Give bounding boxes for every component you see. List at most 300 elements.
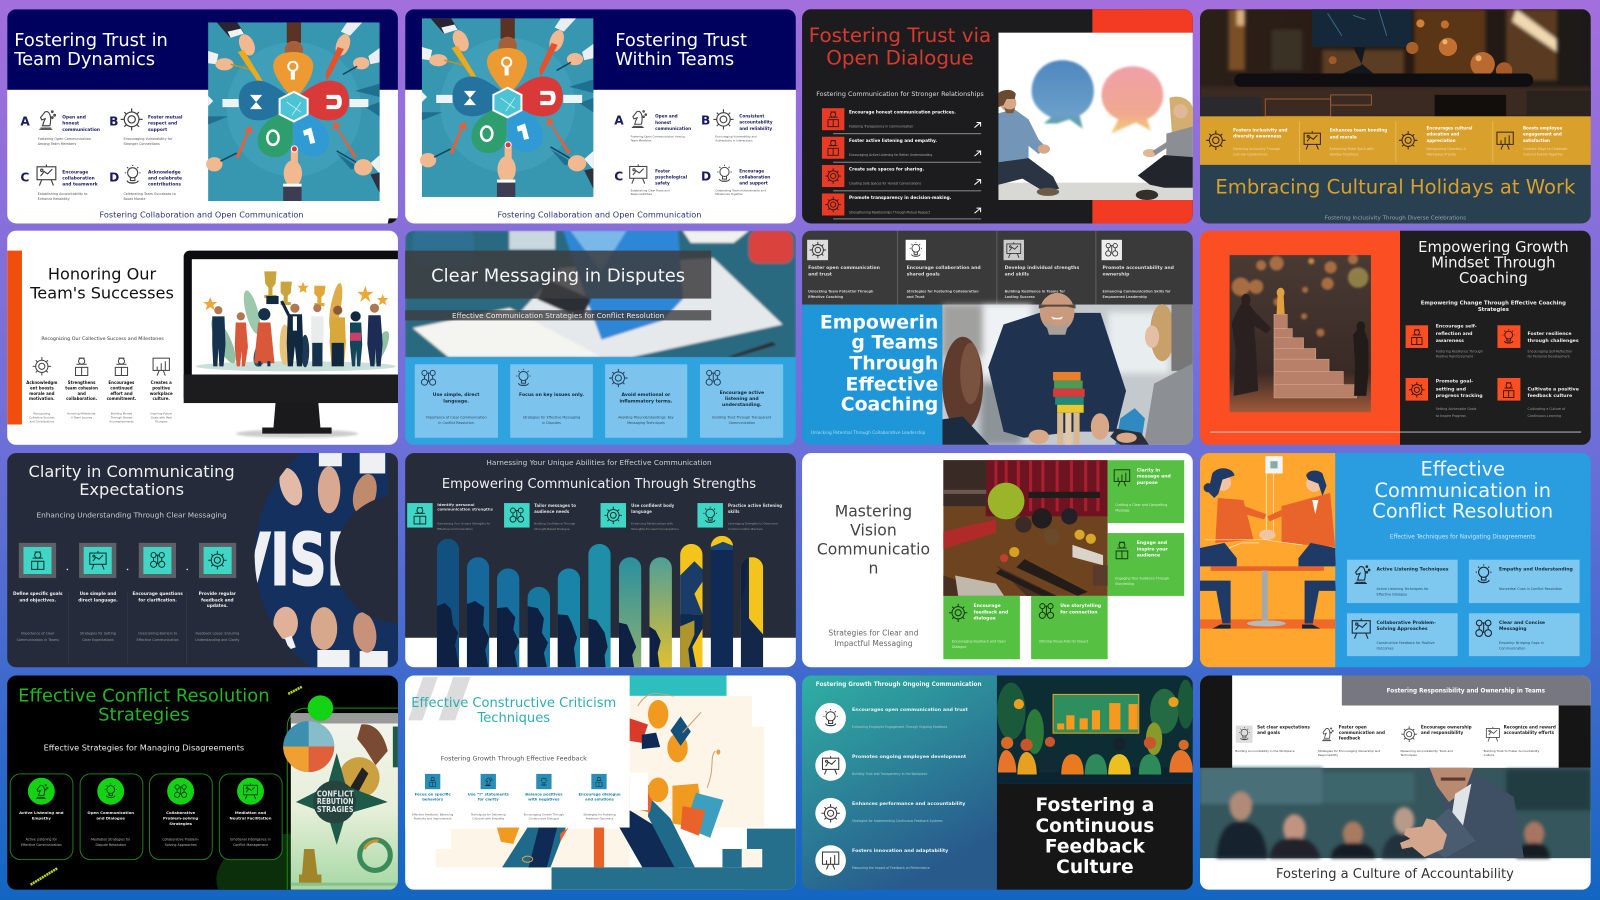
benefit 4 [815, 845, 949, 876]
title: Fostering a Culture of Accountability [1276, 867, 1514, 882]
item B [109, 108, 183, 146]
title [820, 312, 938, 416]
card 1: language. [443, 399, 469, 405]
image: phone with compass poster [283, 708, 398, 890]
card 1: in Conflict Resolution [438, 421, 474, 425]
subtitle: Recognizing Our Collective Success and Milestones [41, 336, 164, 342]
step 3: Encourage questions [132, 591, 183, 597]
image: team hands around flower diagram [206, 22, 380, 201]
item 3: commitment. [107, 396, 137, 401]
card 1: Empathy [32, 815, 51, 820]
image: figures with glowing stairs [1230, 254, 1371, 412]
card 2: Strategies for Effective Messaging [523, 415, 580, 419]
card 4 [700, 364, 783, 438]
item A [614, 111, 691, 142]
subtitle [1421, 301, 1566, 313]
card 3: Collaborative [166, 810, 195, 815]
separator dots [67, 569, 188, 570]
column 3 [1399, 126, 1473, 157]
item 4 [150, 358, 173, 423]
step 2: Use simple and [80, 591, 116, 597]
card 1: Importance of Clear Communication [426, 415, 487, 419]
item 2: team cohesion [65, 385, 98, 390]
panel: slide 13 Effective Conflict Resolution Strategies [7, 676, 398, 900]
item A: communication [655, 126, 691, 131]
item D: Milestones Together [715, 192, 744, 196]
card 2: in Disputes [542, 421, 561, 425]
card 1 [1347, 560, 1458, 603]
card 1: Crafting a Clear and Compelling [1115, 503, 1167, 507]
item B: accountability [739, 119, 773, 124]
item 1: morale and [29, 391, 55, 396]
columns [1206, 121, 1567, 162]
item 2: through challenges [1528, 338, 1579, 344]
image: hands around the word VISION: VISI [231, 518, 346, 602]
panel: slide 2 Fostering Trust Within Teams [405, 9, 796, 223]
image: person with shopping bags illustration [436, 676, 796, 890]
panel: slide 3 Fostering Trust via Open Dialogue [802, 9, 1193, 223]
step 3: Overcoming Barriers to [138, 632, 177, 636]
item 3: Measuring Accountability: Tools and [1401, 749, 1453, 753]
column 3: education and [1427, 132, 1459, 137]
strength 1: Effective Communication [437, 527, 473, 531]
card 3: Collaborative Problem- [1377, 620, 1436, 626]
card 4: Emotional Intelligence in [230, 838, 271, 842]
item B: and reliability [739, 126, 772, 131]
item 1: motivation. [29, 396, 55, 401]
item A: Team Members [630, 138, 652, 142]
top subtitle: Harnessing Your Unique Abilities for Effective Communication [486, 458, 712, 467]
item D: Encourage [739, 168, 764, 173]
title: Fostering a [1035, 795, 1154, 816]
title: Effective Constructive Criticism [411, 696, 616, 711]
item C: Responsibilities [631, 192, 652, 196]
item D: Acknowledge [148, 169, 181, 175]
item 1 [26, 357, 57, 423]
card 3: inflammatory terms. [619, 399, 673, 405]
title [411, 696, 616, 726]
item C: psychological [655, 175, 688, 180]
strength 2: audience needs [534, 509, 570, 514]
title: Coaching [841, 394, 938, 416]
card 2: Mediation Strategies for [91, 838, 131, 842]
item 2: collaboration. [66, 396, 98, 401]
benefit 2: Promotes ongoing employee development [852, 754, 967, 760]
image: monitor with celebrating team [184, 251, 398, 438]
card 2: Empathy and Understanding [1499, 566, 1573, 572]
column 4: Promote accountability and [1103, 265, 1174, 271]
item C: collaboration [62, 176, 95, 182]
column 3: Building Resilience in Teams for [1005, 290, 1065, 294]
benefit 4: Fosters innovation and adaptability [852, 848, 949, 854]
title: Embracing Cultural Holidays at Work [1215, 175, 1576, 198]
step 2: direct language. [78, 597, 118, 603]
item 4: Encourage dialogue [578, 793, 621, 797]
title: Through [849, 352, 938, 374]
item 1: Acknowledgm [26, 380, 57, 385]
strength 3 [601, 503, 679, 531]
item 4: Inspiring Future [150, 411, 172, 415]
subtitle: Fostering Growth Through Effective Feedback [441, 755, 587, 763]
card 4: Neutral Facilitation [230, 815, 272, 820]
item 3: Promote goal- [1436, 379, 1473, 385]
card 2: Engage and [1137, 540, 1167, 546]
item B: respect and [148, 120, 177, 126]
step 4: feedback and [201, 597, 234, 603]
strength 1: communication strengths [437, 507, 494, 512]
item 3 [1400, 725, 1472, 757]
column 1: Fosters inclusivity and [1233, 128, 1287, 134]
card 4: Empathy: Bridging Gaps in [1499, 641, 1544, 645]
heading: Fostering Growth Through Ongoing Communication [816, 682, 982, 688]
title: Team's Successes [29, 284, 174, 303]
card 4: Communication [729, 421, 755, 425]
item 3: continued [110, 385, 133, 390]
column 3: Recognizing Diversity: A [1427, 147, 1467, 151]
item 1: Collective Success [29, 415, 55, 419]
card 4: Clear and Concise [1499, 620, 1545, 626]
title: Within Teams [615, 49, 734, 70]
item D: and support [739, 181, 768, 186]
item D: collaboration [739, 175, 770, 180]
item 4: Goals with Past [151, 415, 173, 419]
subtitle: Enhancing Understanding Through Clear Messaging [37, 510, 227, 519]
step 1: Communication in Teams [17, 638, 59, 642]
item 3: Encouraging Growth Through [524, 812, 564, 816]
step 4: Feedback Loops: Ensuring [195, 632, 239, 636]
card 4: Mediation and [235, 810, 266, 815]
card 4: Communication [1499, 646, 1525, 650]
card 4: for connection [1060, 609, 1098, 615]
item 2: Responsibility [1318, 753, 1338, 757]
title: g Teams [851, 332, 938, 354]
card 1: Effective Communication [21, 843, 62, 847]
column 4: Empowered Leadership [1103, 295, 1148, 299]
item A: A [20, 115, 30, 129]
card 3 [149, 774, 212, 860]
item 4: and solutions [585, 798, 615, 802]
item 2: feedback [1339, 735, 1361, 740]
step 4 [195, 543, 239, 642]
card 2: Dispute Resolution [95, 843, 126, 847]
step 3: for clarification. [138, 597, 177, 603]
title: Clear Messaging in Disputes [431, 266, 685, 287]
footer: Fostering Inclusivity Through Diverse Celebrations [1325, 215, 1466, 221]
item D [109, 165, 182, 201]
item 4: culture. [153, 396, 170, 401]
title: Empowerin [820, 312, 938, 334]
card 2 [1108, 533, 1184, 596]
image: phone with compass poster: REBUTION [317, 797, 354, 806]
strength 3: Use confident body [631, 503, 675, 508]
title: Techniques [477, 711, 550, 726]
strength 1 [407, 502, 494, 531]
item 1 [1406, 324, 1483, 359]
item B: B [701, 113, 710, 127]
benefit 1: Enhancing Employee Engagement Through Ongoing Feedback [852, 725, 948, 729]
title: Feedback [1045, 837, 1146, 858]
footer: Fostering Collaboration and Open Communication [100, 209, 304, 219]
step 2: Clear Expectations [82, 638, 114, 642]
title: Coaching [1459, 270, 1528, 287]
item 2 [468, 774, 510, 820]
item 1: Positive Reinforcement [1436, 355, 1474, 359]
strength 3: Enhancing Relationships with [631, 521, 673, 525]
item 4 [1497, 378, 1579, 418]
panel: slide 1 Fostering Trust in Team Dynamics [7, 9, 398, 223]
item B: Consistent [739, 113, 764, 118]
item 4: workplace [150, 391, 173, 396]
card 3: feedback and [973, 609, 1008, 615]
item 2: Strategies for Encouraging Ownership and [1318, 749, 1380, 753]
title [29, 462, 235, 499]
item 1: Encourage honest communication practices. [849, 109, 956, 115]
title [18, 686, 270, 725]
item 2: Use “I” statements [468, 793, 510, 797]
card 3: Messaging Techniques [627, 421, 665, 425]
subtitle: Strategies [1478, 307, 1509, 313]
column 1 [807, 240, 880, 299]
card 2 [80, 774, 143, 860]
footer: Unlocking Potential Through Collaborative Leadership [811, 430, 926, 436]
column 3: Workplace Priority [1427, 153, 1456, 157]
panel: slide 8 Empowering Growth Mindset Through Coaching [1200, 231, 1591, 445]
card 3: Constructive Feedback for Positive [1377, 641, 1435, 645]
item 2: A Team Journey [71, 415, 93, 419]
decorative quote marks [408, 677, 470, 720]
item 4: positive [152, 385, 170, 390]
item B [701, 109, 773, 142]
item 3: progress tracking [1436, 393, 1483, 399]
item 3: and responsibility [1421, 730, 1464, 735]
item 1: Fostering Transparency in Communication [849, 125, 913, 129]
item 2: Foster active listening and empathy. [849, 138, 937, 144]
column 4 [1102, 240, 1174, 299]
item B: Encouraging Vulnerability for [123, 137, 173, 141]
item 1: Focus on specific [415, 793, 451, 797]
item 3: Encourage ownership [1421, 725, 1472, 730]
step 3 [132, 543, 183, 642]
strength 3: language [631, 509, 652, 514]
item 4: Strategies for Fostering [583, 812, 616, 816]
image: two people talking with speech bubbles [998, 33, 1193, 200]
footer: Fostering Collaboration and Open Communication [498, 209, 701, 219]
column 2: Holiday Traditions [1330, 153, 1359, 157]
item 4 [822, 193, 981, 219]
card 1: Active Listening and [19, 810, 64, 815]
title: Fostering Trust [615, 30, 747, 51]
item 2: Techniques for Delivering [470, 812, 506, 816]
title: Effective Conflict Resolution [18, 686, 270, 707]
item 3: with negatives [528, 798, 560, 802]
item 4: Strengthening Relationships Through Mutual Respect [849, 210, 931, 214]
item 2 [1318, 725, 1385, 757]
subtitle: Empowering Change Through Effective Coaching [1421, 301, 1566, 307]
item 1 [1235, 725, 1310, 753]
image: desk with laptop and documents [405, 231, 796, 358]
column 2: Encourage collaboration and [907, 265, 981, 271]
item 1: Recognizing [34, 411, 50, 415]
item A: Fostering Open Communication [38, 137, 91, 141]
column 1: Effective Coaching [808, 295, 844, 299]
card 4 [219, 774, 282, 860]
benefit 3: Strategies for Implementing Continuous Feedback Systems [852, 819, 943, 823]
item D: and celebrate [148, 176, 182, 182]
item 1: reflection and [1436, 331, 1473, 337]
item 1: ent boosts [30, 385, 54, 390]
panel: slide 9 Clarity in Communicating Expectations [7, 453, 398, 667]
item B: Stronger Connections [123, 142, 160, 146]
title [817, 502, 930, 577]
strength 1: Harnessing Your Unique Strengths for [437, 521, 491, 525]
item C: and teamwork [62, 182, 98, 188]
item 2: Foster open [1339, 725, 1367, 730]
item A: Open and [655, 113, 678, 118]
card 3: Strategies [169, 821, 193, 826]
item C: Encourage [62, 169, 88, 175]
item 1: Set clear expectations [1257, 725, 1310, 730]
subtitle: Effective Strategies for Managing Disagreements [44, 743, 244, 753]
item 3 [1406, 378, 1483, 418]
item 3: Encourages [108, 380, 135, 385]
column 4: Enhancing Communication Skills for [1103, 290, 1171, 294]
strength 4 [697, 503, 782, 531]
title: Communication in [1374, 479, 1551, 502]
item 2: for Personal Development [1528, 355, 1571, 359]
card 2: audience [1137, 553, 1160, 559]
title: Fostering Trust via [809, 24, 991, 47]
subtitle: Effective Techniques for Navigating Disagreements [1390, 534, 1536, 540]
item 1: Positivity and Improvement [414, 816, 452, 820]
card 2 [1469, 560, 1580, 603]
item 2 [1497, 325, 1579, 359]
panel: slide 16 Fostering a Culture of Accountability [1200, 676, 1591, 890]
title [1372, 458, 1553, 522]
title [1035, 795, 1154, 878]
item 2: and [77, 391, 86, 396]
item B: support [148, 127, 167, 133]
image: phone with compass poster: CONFLICT [317, 789, 354, 798]
column 1: Cultural Celebrations [1233, 153, 1268, 157]
step 1: Importance of Clear [21, 632, 55, 636]
title: Continuous [1035, 816, 1154, 837]
item 4: Continuous Learning [1528, 414, 1561, 418]
item 3: Balance positives [525, 793, 563, 797]
image: dark office with monitor and ornaments [1200, 9, 1591, 116]
subtitle: Fostering Communication for Stronger Relationships [816, 90, 984, 98]
step 2 [78, 543, 118, 642]
item 3 [107, 358, 137, 423]
card 3: Collaborative Problem- [162, 838, 200, 842]
item B: B [109, 115, 119, 129]
strength 3: Strengths-Focused Conversations [631, 527, 679, 531]
item 3: Constructive Dialogue [529, 816, 559, 820]
item 2: communication and [1339, 730, 1385, 735]
strength 4: skills [728, 509, 740, 514]
item 3: to Inspire Progress [1436, 414, 1466, 418]
item A: Open and [62, 114, 86, 120]
card 2: inspire your [1137, 547, 1168, 553]
item A: honest [655, 120, 671, 125]
title: Mastering [835, 502, 912, 520]
title: Empowering Growth [1418, 239, 1569, 256]
card 3: Problem-solving [163, 815, 199, 820]
benefit 2 [815, 750, 967, 781]
item C: Establishing Clear Roles and [631, 189, 670, 193]
item 3: Create safe spaces for sharing. [849, 166, 924, 172]
column 1: Unlocking Team Potential Through [808, 290, 874, 294]
item C: C [614, 170, 623, 184]
item 2: for clarity [478, 798, 499, 802]
item 4: Culture [1484, 753, 1495, 757]
item C [614, 164, 688, 196]
item 3 [822, 165, 981, 191]
item C: Establishing Accountability to [38, 192, 87, 196]
card 1: Use simple, direct [433, 392, 480, 398]
card 4 [1031, 596, 1108, 659]
title: Communicatio [817, 541, 930, 559]
item 1: Encourage self- [1436, 324, 1477, 330]
column 4: Creative Ways to Celebrate [1523, 147, 1567, 151]
item C [20, 164, 98, 201]
item 1: behaviors [422, 798, 444, 802]
card 3 [943, 596, 1020, 659]
column 4: engagement and [1523, 132, 1562, 137]
column 1: diversity awareness [1233, 134, 1282, 140]
image: coach with team and stacked blocks [942, 293, 1193, 445]
panel: slide 14 Effective Constructive Criticism Techniques [405, 676, 796, 890]
column 1 [1206, 128, 1287, 157]
column 2: shared goals [907, 271, 940, 277]
title: Open Dialogue [826, 46, 974, 69]
item C: Enhance Reliability [38, 197, 70, 201]
step 4: updates. [207, 603, 228, 609]
column 1: Foster open communication [808, 265, 880, 271]
item 3: Accomplishments [109, 419, 134, 423]
item 4 [1484, 725, 1556, 757]
title [810, 27, 990, 68]
card 3 [605, 364, 687, 438]
item B: Encouraging Vulnerability and [715, 135, 757, 139]
benefit 4: Measuring the Impact of Feedback on Performance [852, 866, 930, 870]
card 3 [1347, 613, 1458, 656]
card 1: purpose [1137, 480, 1158, 486]
card 1: message and [1137, 474, 1171, 480]
image: team hands around flower diagram [420, 18, 593, 197]
item 4: Triumphs [154, 419, 168, 423]
benefit 3: Enhances performance and accountability [852, 801, 966, 807]
item D [701, 165, 770, 196]
step 1: Define specific goals [13, 591, 63, 597]
card 4 [1469, 613, 1580, 656]
card 2: Focus on key issues only. [519, 392, 584, 398]
item 3: setting and [1436, 386, 1466, 392]
header bar: Fostering Responsibility and Ownership in Teams [1387, 689, 1546, 695]
item A: communication [62, 127, 100, 133]
panel: slide 10 Empowering Communication Through Strengths [405, 453, 796, 667]
item 1 [412, 774, 454, 820]
item 4: Cultivating a Culture of [1528, 407, 1566, 411]
card 3: Avoiding Misunderstandings: Key [618, 415, 674, 419]
column 3: Encourages cultural [1427, 126, 1473, 131]
card 4: Building Trust Through Transparent [712, 415, 772, 419]
item 3: Setting Achievable Goals [1436, 407, 1477, 411]
item 1: and goals [1257, 730, 1280, 735]
strength 1: Identify personal [437, 502, 474, 507]
item D: contributions [148, 182, 181, 188]
item A: A [614, 113, 624, 127]
card 1: Active Listening Techniques [1377, 566, 1449, 572]
